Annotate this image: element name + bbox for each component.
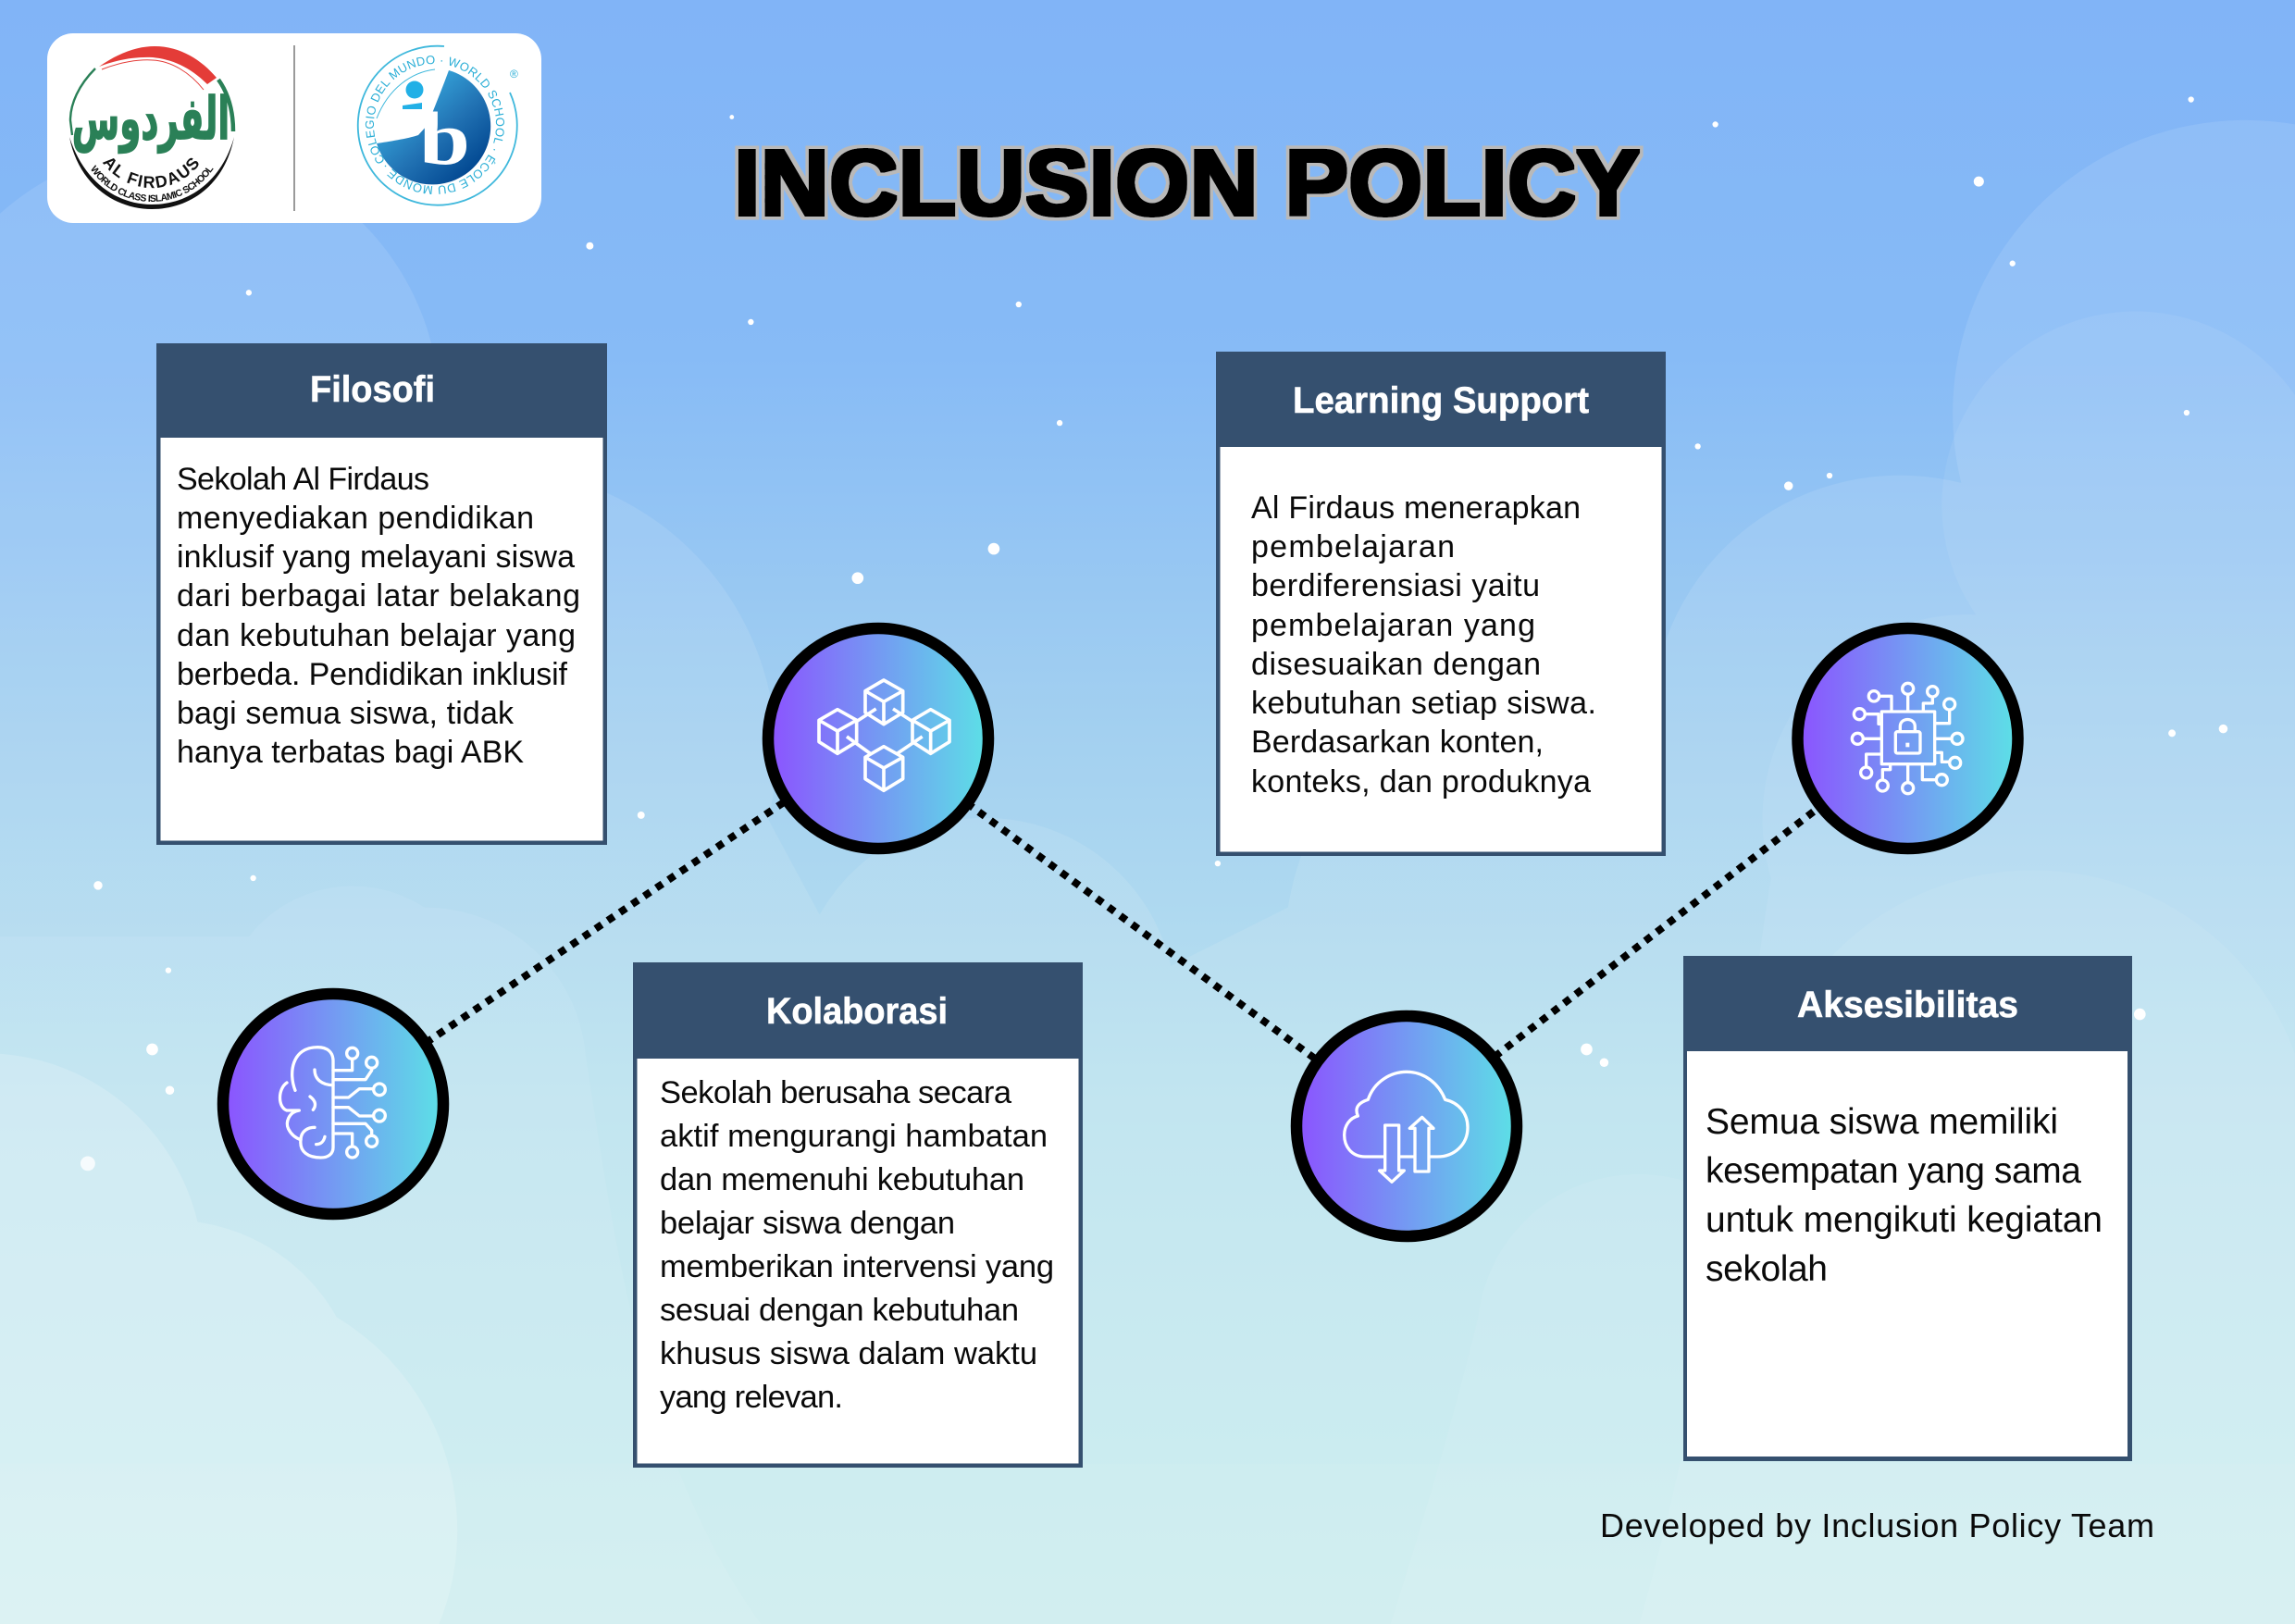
body text: Filosofi: Sekolah Al Firdaus xyxy=(177,462,429,497)
icon node: brain circuit xyxy=(223,994,443,1214)
body text: Kolaborasi: Sekolah berusaha secara xyxy=(660,1075,1012,1110)
panel: Filosofi xyxy=(156,343,607,845)
body text: Kolaborasi: yang relevan. xyxy=(660,1380,843,1415)
heading: Kolaborasi: Kolaborasi xyxy=(766,991,948,1032)
heading: Learning Support: Learning Support xyxy=(1293,380,1589,421)
body text: Filosofi: dari berbagai latar belakang xyxy=(177,578,580,614)
body text: Learning Support xyxy=(1251,490,1596,800)
body text: Filosofi: bagi semua siswa, tidak xyxy=(177,696,515,731)
body text: Aksesibilitas: Semua siswa memiliki xyxy=(1706,1102,2058,1142)
body text: Aksesibilitas: sekolah xyxy=(1706,1249,1828,1289)
logo panel xyxy=(47,33,541,223)
body text: Kolaborasi: memberikan intervensi yang xyxy=(660,1249,1054,1284)
body text: Kolaborasi: dan memenuhi kebutuhan xyxy=(660,1162,1024,1197)
logo: Al Firdaus: AL FIRDAUS xyxy=(102,157,198,189)
panel: Aksesibilitas xyxy=(1683,956,2132,1461)
body text: Learning Support: konteks, dan produknya xyxy=(1251,764,1591,800)
body text: Kolaborasi: sesuai dengan kebutuhan xyxy=(660,1293,1019,1328)
body text: Learning Support: kebutuhan setiap siswa. xyxy=(1251,686,1596,721)
icon node: circuit lock xyxy=(1797,628,2017,849)
body text: Kolaborasi: belajar siswa dengan xyxy=(660,1206,955,1241)
heading: Filosofi: Filosofi xyxy=(310,369,435,410)
body text: Learning Support: Berdasarkan konten, xyxy=(1251,725,1544,760)
logo: Al Firdaus xyxy=(68,46,235,209)
logo: Al Firdaus: الفردوس xyxy=(72,86,230,154)
body text: Kolaborasi xyxy=(660,1075,1054,1415)
body text: Kolaborasi: khusus siswa dalam waktu xyxy=(660,1336,1037,1371)
body text: Learning Support: Al Firdaus menerapkan xyxy=(1251,490,1581,526)
logo: Al Firdaus: WORLD CLASS ISLAMIC SCHOOL xyxy=(91,165,214,202)
logo: IB World School: COLEGIO DEL MUNDO · WORLD SCHOOL · ÉCOLE DU MONDE · xyxy=(365,56,504,194)
panel: Kolaborasi xyxy=(633,962,1083,1468)
title: INCLUSION POLICY xyxy=(734,131,1640,235)
body text: Filosofi: berbeda. Pendidikan inklusif xyxy=(177,657,568,692)
body text: Learning Support: pembelajaran yang xyxy=(1251,608,1535,643)
dotted connector lines xyxy=(426,800,1818,1061)
body text: Learning Support: disesuaikan dengan xyxy=(1251,647,1541,682)
body text: Learning Support: pembelajaran xyxy=(1251,529,1455,564)
logo: IB World School: b xyxy=(419,96,470,180)
icon node: network blocks xyxy=(768,628,988,849)
icon node: cloud transfer xyxy=(1296,1016,1517,1236)
body text: Filosofi: hanya terbatas bagi ABK xyxy=(177,735,524,770)
logo divider xyxy=(293,45,295,211)
body text: Filosofi: menyediakan pendidikan xyxy=(177,501,534,536)
body text: Aksesibilitas: untuk mengikuti kegiatan xyxy=(1706,1200,2103,1240)
logo: IB World School: ® xyxy=(510,68,518,81)
body text: Kolaborasi: aktif mengurangi hambatan xyxy=(660,1119,1048,1154)
body text: Filosofi xyxy=(177,462,580,770)
body text: Filosofi: inklusif yang melayani siswa xyxy=(177,539,575,575)
heading: Aksesibilitas: Aksesibilitas xyxy=(1797,985,2018,1025)
decorative: white specks xyxy=(81,96,2227,1171)
body text: Filosofi: dan kebutuhan belajar yang xyxy=(177,618,576,653)
footer credit: Developed by Inclusion Policy Team xyxy=(1600,1506,2154,1544)
body text: Aksesibilitas xyxy=(1706,1102,2103,1289)
panel: Learning Support xyxy=(1216,352,1666,856)
body text: Learning Support: berdiferensiasi yaitu xyxy=(1251,568,1540,603)
body text: Aksesibilitas: kesempatan yang sama xyxy=(1706,1151,2081,1191)
